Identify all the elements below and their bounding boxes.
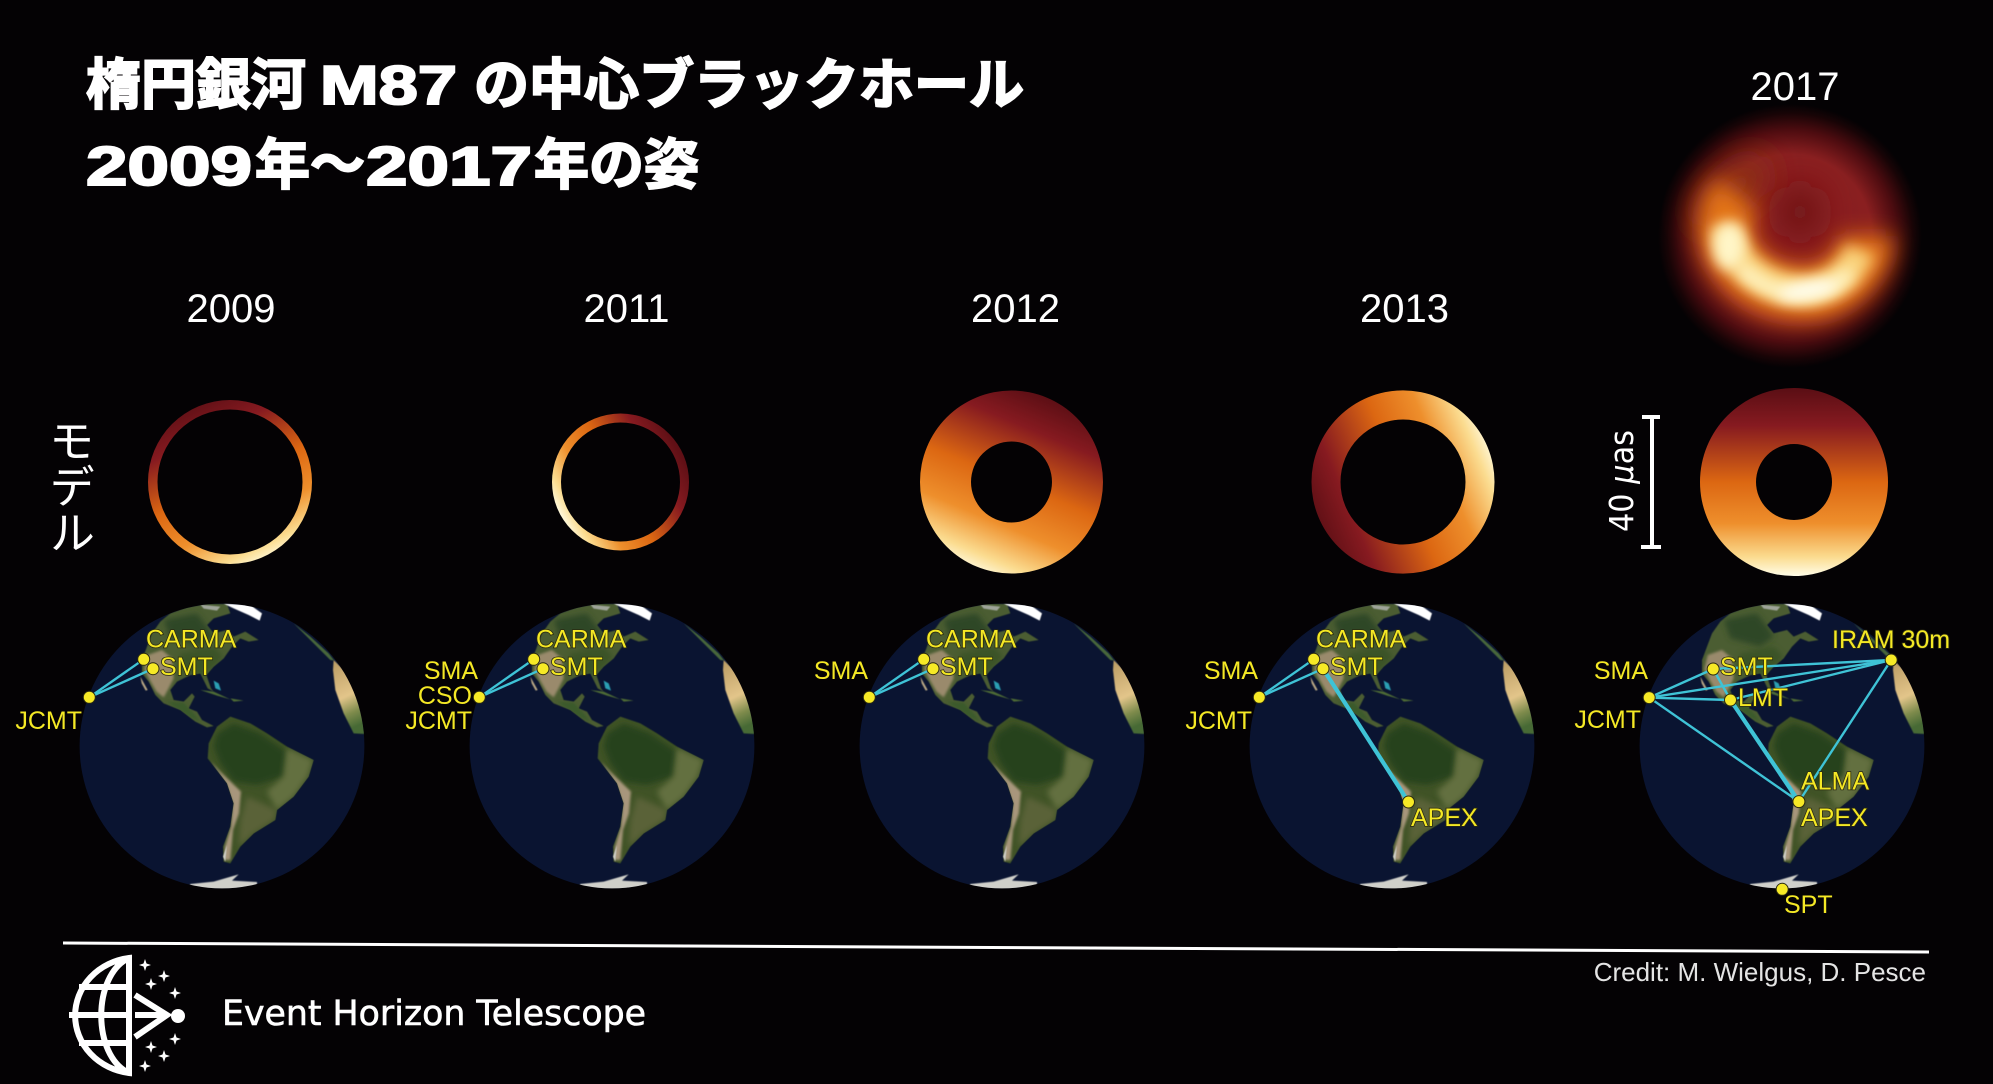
globe with baselines 2017: SMA <box>1594 657 1648 685</box>
globe with baselines 2017 <box>1574 604 1950 919</box>
panel: 2012 <box>814 287 1145 890</box>
globe with baselines 2013: CARMA <box>1316 626 1407 654</box>
model ring 2013 <box>1311 390 1495 574</box>
title <box>86 54 1024 197</box>
icon: globe with arrow and stars <box>69 958 185 1073</box>
panel: 2017 <box>1574 65 1950 919</box>
title: の中心ブラックホール <box>474 54 1024 116</box>
globe with baselines 2012: SMT <box>940 653 993 681</box>
globe with baselines 2017: SMT <box>1720 653 1773 681</box>
model ring 2012 <box>920 390 1103 574</box>
logo: Event Horizon Telescope <box>69 958 646 1073</box>
title: M87 <box>320 54 457 116</box>
panel: 2013 <box>1185 287 1535 890</box>
globe with baselines 2011: CARMA <box>536 626 627 654</box>
globe with baselines 2013: SMT <box>1330 653 1383 681</box>
globe with baselines 2009 <box>15 604 365 890</box>
footer rule <box>63 943 1929 952</box>
globe with baselines 2011: JCMT <box>405 707 472 735</box>
year heading 2009: 2009 <box>187 287 275 331</box>
model ring 2017 <box>1700 388 1888 576</box>
model ring 2011 <box>552 414 689 550</box>
globe with baselines 2009: JCMT <box>15 707 82 735</box>
model ring 2009 <box>148 400 312 564</box>
globe with baselines 2011: SMT <box>550 653 603 681</box>
globe with baselines 2013 <box>1185 604 1535 890</box>
globe with baselines 2012 <box>814 604 1145 890</box>
globe with baselines 2013: SMA <box>1204 657 1258 685</box>
scale bar: 40 μas <box>1602 430 1641 532</box>
panel: 2011 <box>405 287 755 890</box>
title: 2017 <box>366 135 532 197</box>
title: 楕円銀河 <box>86 54 306 116</box>
title: 2009 <box>86 135 252 197</box>
title: 年の姿 <box>534 134 699 196</box>
credit line: Credit: M. Wielgus, D. Pesce <box>1594 957 1926 987</box>
globe with baselines 2009: SMT <box>160 653 213 681</box>
globe with baselines 2011: SMA <box>424 657 478 685</box>
globe with baselines 2017: APEX <box>1801 804 1868 832</box>
year heading 2011: 2011 <box>583 287 670 331</box>
year heading 2017: 2017 <box>1751 65 1839 109</box>
globe with baselines 2012: CARMA <box>926 626 1017 654</box>
globe with baselines 2012: SMA <box>814 657 868 685</box>
title: 年～ <box>255 134 365 196</box>
row label: model: モデル <box>43 417 95 555</box>
logo wordmark: Event Horizon Telescope <box>222 994 646 1034</box>
globe with baselines 2011 <box>405 604 755 890</box>
year heading 2013: 2013 <box>1360 287 1449 331</box>
globe with baselines 2017: ALMA <box>1801 768 1869 796</box>
globe with baselines 2013: JCMT <box>1185 707 1252 735</box>
globe with baselines 2017: LMT <box>1738 684 1788 712</box>
year heading 2012: 2012 <box>971 287 1060 331</box>
globe with baselines 2017: SPT <box>1784 891 1833 919</box>
globe with baselines 2009: CARMA <box>146 626 237 654</box>
globe with baselines 2011: CSO <box>418 682 472 710</box>
globe with baselines 2013: APEX <box>1411 804 1478 832</box>
black hole image 2017 <box>1658 104 1922 368</box>
panel: 2009 <box>15 287 365 890</box>
globe with baselines 2017: IRAM 30m <box>1832 626 1950 654</box>
globe with baselines 2017: JCMT <box>1574 706 1641 734</box>
scale bar <box>1602 417 1661 547</box>
